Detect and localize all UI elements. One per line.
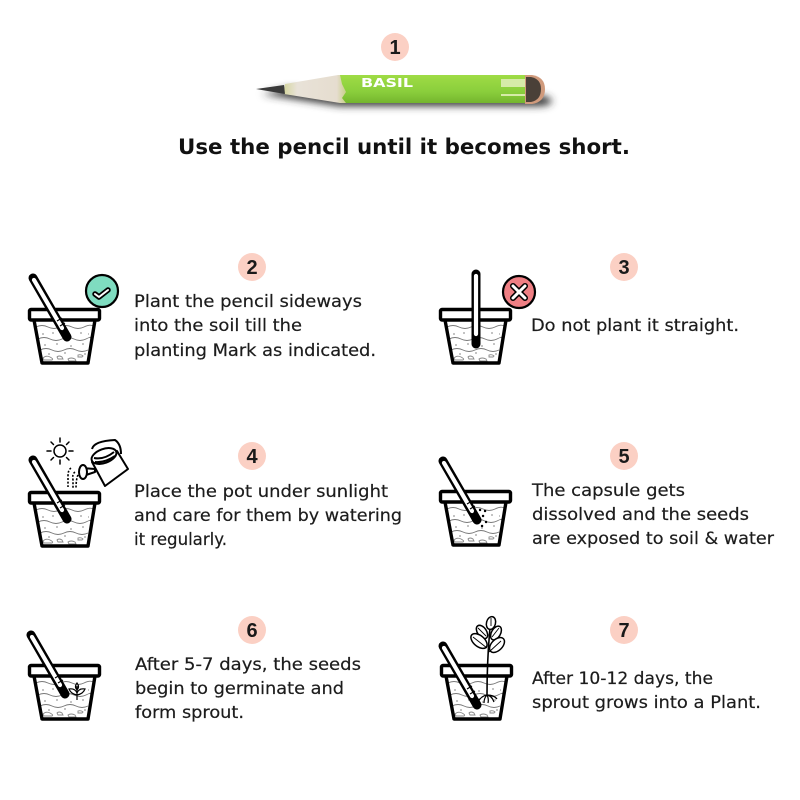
step 6 text: form sprout. [135,703,244,722]
icon: water drops [68,468,78,489]
step 1 number badge: 1 [389,37,401,59]
step 4 text: Place the pot under sunlight [134,482,389,501]
step 4 text: it regularly. [134,530,227,549]
step 6 badge: 6 [246,620,258,642]
panel: step 4 [30,438,402,549]
step 6 text [135,655,361,722]
icon: pot with sprout [30,635,100,719]
step 7 badge [610,616,638,644]
step 4 badge: 4 [246,446,258,468]
step 6 badge [238,616,266,644]
panel: step 2 [30,253,376,363]
step 7 text: sprout grows into a Plant. [532,693,761,712]
icon: pot with pencil [30,460,100,546]
step 3 text: Do not plant it straight. [531,316,739,335]
step 1 number badge [381,33,409,61]
icon: pot with straight pencil [440,274,510,363]
step 4 badge [238,442,266,470]
step 2 text: into the soil till the [134,316,302,335]
step 5 text [531,481,774,548]
icon: watering can [79,440,128,486]
panel: step 6 [30,616,361,722]
step 2 text [134,292,376,360]
step 4 text: and care for them by watering [134,506,402,525]
step 2 text: Plant the pencil sideways [134,292,362,311]
step 4 text [134,482,402,549]
step 6 text: After 5-7 days, the seeds [135,655,361,674]
step 2 badge: 2 [246,257,258,279]
step 5 text: dissolved and the seeds [532,505,749,524]
step 7 badge: 7 [618,620,630,642]
panel: step 5 [440,442,774,548]
step 2 text: planting Mark as indicated. [134,341,376,360]
title: Use the pencil until it becomes short. [178,135,630,159]
step 7 text [532,669,761,712]
icon: pot with dissolving pencil [440,461,510,545]
step 5 badge: 5 [618,446,630,468]
step 6 text: begin to germinate and [135,679,344,698]
step 5 badge [610,442,638,470]
step 3 badge [610,253,638,281]
step 5 text: are exposed to soil & water [532,529,774,548]
icon: pot with slanted pencil [30,278,100,363]
icon: sun [47,438,73,464]
step 7 text: After 10-12 days, the [532,669,713,688]
step 2 badge [238,253,266,281]
icon: cross badge [503,276,535,308]
panel: step 7 [442,616,761,719]
pencil label: BASIL [361,76,413,90]
panel: step 3 [440,253,739,363]
pencil photo [256,75,552,106]
icon: pot with plant [442,616,512,719]
step 5 text: The capsule gets [531,481,685,500]
step 3 badge: 3 [618,257,630,279]
icon: check badge [86,275,118,307]
